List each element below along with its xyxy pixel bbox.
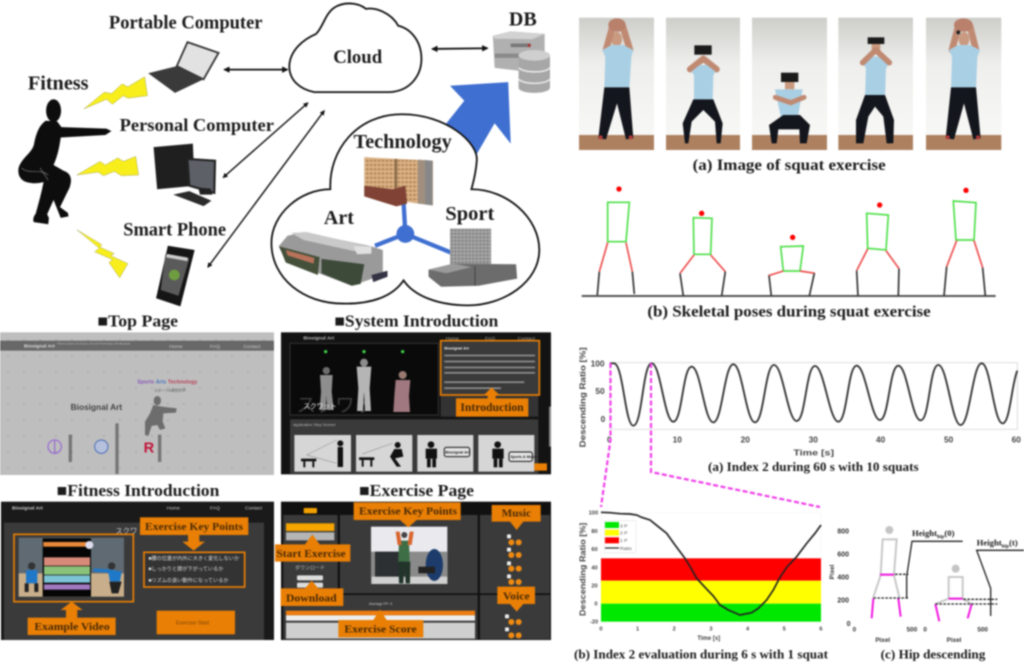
legend: 3 P bbox=[620, 523, 628, 529]
fitness introduction heading: ■Fitness Introduction bbox=[57, 481, 220, 500]
y axis labels: 100 bbox=[589, 511, 598, 517]
exercise start button: Exercise Start bbox=[176, 621, 210, 627]
x axis labels: 500 bbox=[907, 626, 918, 633]
x axis labels: 6 bbox=[819, 626, 822, 632]
x axis labels bbox=[599, 626, 822, 632]
height t label: hip bbox=[1002, 543, 1009, 549]
system introduction heading: ■System Introduction bbox=[334, 312, 499, 331]
x axis labels: 1 bbox=[636, 626, 639, 632]
page background: Biosignal Art bbox=[303, 336, 335, 342]
chart: hip descending bbox=[829, 526, 1024, 662]
x axis labels: 5 bbox=[783, 626, 786, 632]
download label: Download bbox=[286, 593, 337, 605]
video preview with three avatars: スクワット bbox=[303, 402, 337, 410]
start exercise label: Start Exercise bbox=[276, 548, 346, 560]
exercise score label bbox=[338, 609, 423, 637]
panel: top page screenshot bbox=[0, 312, 274, 475]
arrow: cloud to DB bbox=[432, 46, 487, 51]
legend: Ratio bbox=[620, 546, 632, 552]
grey squat figure bbox=[145, 396, 177, 436]
sport label: Sport bbox=[445, 203, 495, 225]
y axis labels: 60 bbox=[591, 547, 598, 553]
caption: skeletal poses: (b) Skeletal poses during squat exercise bbox=[647, 304, 931, 321]
music label bbox=[492, 505, 541, 530]
art building bbox=[279, 232, 387, 286]
height 0 annotation bbox=[873, 541, 963, 598]
start exercise label bbox=[275, 534, 350, 562]
y axis labels bbox=[591, 359, 606, 424]
pose 5 bbox=[944, 188, 985, 296]
download label bbox=[281, 581, 343, 606]
magenta zoom guide lines bbox=[601, 363, 820, 507]
standing skeleton bbox=[872, 526, 901, 618]
introduction text box bbox=[441, 341, 539, 395]
nav bar: FAQ bbox=[210, 344, 220, 350]
key points list: ■しっかりと膝が下がっているか bbox=[148, 565, 223, 573]
x axis labels: 50 bbox=[944, 435, 954, 445]
y axis labels: 40 bbox=[591, 565, 598, 571]
height 0 label: Height bbox=[912, 528, 937, 538]
y axis title: Descending Ratio [%] bbox=[577, 523, 587, 616]
partner logos: R bbox=[144, 441, 155, 457]
squat skeleton bbox=[935, 565, 972, 621]
x axis labels: 60 bbox=[1012, 435, 1021, 445]
application step cards bbox=[294, 435, 537, 472]
cloud shape bbox=[289, 3, 421, 92]
arrow: cloud to PC bbox=[223, 103, 308, 177]
portable computer label: Portable Computer bbox=[109, 13, 262, 34]
x axis labels: 4 bbox=[746, 626, 750, 632]
key points list: ■リズムの良い動作になっているか bbox=[148, 576, 229, 584]
y axis labels: 0 bbox=[594, 602, 597, 608]
y axis labels bbox=[589, 511, 598, 626]
smart phone label: Smart Phone bbox=[123, 220, 226, 241]
y axis labels: -20 bbox=[590, 620, 598, 626]
pose 3 bbox=[768, 235, 815, 296]
height 0 label: hip bbox=[937, 534, 944, 540]
x axis labels bbox=[607, 435, 1021, 445]
voice label bbox=[497, 587, 535, 612]
nav bar: Home bbox=[169, 344, 183, 350]
y axis labels: 200 bbox=[837, 598, 849, 605]
tagline: Sports Arts Technology bbox=[137, 379, 197, 385]
key points label: Exercise Key Points bbox=[145, 521, 243, 533]
page background: Home bbox=[446, 336, 459, 342]
y axis labels: 50 bbox=[595, 386, 605, 396]
caption: index 2 during 60 s: (a) Index 2 during 60 s with 10 squats bbox=[708, 460, 919, 474]
y axis labels: 80 bbox=[591, 529, 598, 535]
x axis labels: 0 bbox=[853, 626, 857, 633]
three-lobed domain cloud bbox=[271, 114, 539, 305]
nav bar: Biosignal Art bbox=[24, 344, 55, 350]
key points list: ■腰の位置が内外に大きく変化しないか bbox=[148, 554, 239, 562]
legend bbox=[604, 521, 636, 553]
height t label: (t) bbox=[1009, 537, 1018, 547]
descending ratio curve bbox=[610, 363, 1017, 426]
ratio curve bbox=[601, 512, 821, 615]
y axis title: Descending Ratio [%] bbox=[577, 347, 587, 447]
page background: Contact bbox=[518, 336, 535, 342]
introduction label: Introduction bbox=[460, 402, 524, 414]
exercise score label: Exercise Score bbox=[344, 624, 417, 636]
video preview with three avatars bbox=[290, 343, 438, 417]
laptop icon bbox=[148, 42, 219, 93]
arrow: cloud to phone bbox=[208, 111, 324, 267]
photo 2: descending bbox=[666, 18, 740, 150]
arrow up to video bbox=[61, 602, 83, 618]
score table: Average FP: 0 bbox=[369, 602, 392, 606]
x axis title: Time [s] bbox=[697, 636, 720, 642]
DB label: DB bbox=[509, 9, 537, 31]
hub connecting domains bbox=[375, 202, 452, 253]
arrow up to introduction bbox=[484, 387, 499, 399]
exercise page heading: ■Exercise Page bbox=[359, 481, 474, 500]
desktop PC icon bbox=[154, 144, 215, 206]
page background: スクワ bbox=[115, 526, 137, 535]
x axis labels bbox=[853, 626, 988, 644]
introduction text box: Biosignal Art bbox=[444, 345, 470, 350]
squat silhouette bbox=[18, 99, 111, 224]
nav bar bbox=[0, 341, 274, 351]
x axis labels: 10 bbox=[673, 435, 682, 445]
y axis labels: 400 bbox=[837, 574, 849, 581]
page background bbox=[281, 332, 551, 474]
y axis labels: 20 bbox=[591, 583, 598, 589]
panel: system overview diagram bbox=[18, 3, 550, 306]
music and voice option buttons bbox=[505, 534, 522, 638]
cloud label: Cloud bbox=[333, 47, 383, 68]
voice label: Voice bbox=[503, 590, 530, 602]
application step cards: Biosignal Art bbox=[445, 450, 471, 455]
photo 1: standing bbox=[579, 18, 654, 150]
y axis labels: 0 bbox=[601, 414, 606, 424]
x axis labels: 30 bbox=[809, 435, 818, 445]
nav bar: Contact bbox=[243, 344, 261, 350]
music label: Music bbox=[502, 508, 531, 520]
page-top button bbox=[534, 463, 547, 471]
page background: Biosignal Art bbox=[12, 505, 43, 511]
tagline bbox=[137, 379, 197, 392]
pose 4 bbox=[857, 202, 899, 296]
panel: squat images and skeleton poses bbox=[579, 18, 1001, 321]
top page heading: ■Top Page bbox=[97, 312, 178, 331]
key points label bbox=[140, 517, 248, 535]
caption: hip descending: (c) Hip descending bbox=[881, 648, 986, 662]
y axis labels: 100 bbox=[591, 359, 605, 369]
video preview with three avatars: スクワッ bbox=[297, 395, 374, 417]
chart: index 2 evaluation during 6 s bbox=[574, 511, 829, 662]
exercise key points label: Exercise Key Points bbox=[359, 506, 457, 518]
arrow down to key points bbox=[182, 534, 205, 551]
y axis labels: 800 bbox=[837, 528, 849, 535]
x axis labels: Pixel bbox=[947, 637, 962, 644]
photo 5: standing bbox=[926, 18, 1001, 150]
page background bbox=[0, 332, 274, 475]
page background: FAQ bbox=[485, 336, 495, 342]
height t label: Height bbox=[977, 537, 1002, 547]
technology building bbox=[364, 157, 433, 206]
score table bbox=[286, 602, 475, 639]
score bands bbox=[601, 513, 821, 622]
x axis labels: 500 bbox=[977, 626, 988, 633]
chart: index 2 during 60 s bbox=[577, 347, 1021, 474]
panel: system introduction screenshot bbox=[281, 312, 551, 474]
fitness label: Fitness bbox=[28, 72, 89, 94]
page background: Application Step Screen bbox=[293, 422, 336, 427]
example video label: Example Video bbox=[34, 621, 110, 633]
application step cards: Sports & Music bbox=[510, 455, 537, 459]
panel: exercise page screenshot bbox=[275, 481, 551, 640]
technology label: Technology bbox=[354, 131, 452, 153]
x axis labels: 3 bbox=[709, 626, 712, 632]
biosignal art title: Biosignal Art bbox=[71, 402, 122, 412]
y axis title: Pixel bbox=[829, 564, 836, 579]
photo 4: ascending bbox=[838, 18, 913, 150]
x axis labels: 40 bbox=[876, 435, 886, 445]
page background bbox=[281, 502, 551, 640]
height 0 label: (0) bbox=[944, 528, 955, 538]
caption: index 2 evaluation: (b) Index 2 evaluation during 6 s with 1 squat bbox=[574, 648, 829, 662]
legend: 2 P bbox=[620, 531, 628, 537]
nav bar: Fitness System for Sports, Arts and Technology with Biosignal bbox=[57, 342, 130, 346]
x axis labels: 0 bbox=[923, 626, 927, 633]
pose 2 bbox=[680, 211, 725, 296]
x axis labels: Pixel bbox=[875, 637, 890, 644]
start and stop buttons: ダウンロード bbox=[295, 564, 325, 571]
database icon bbox=[493, 31, 550, 93]
tagline: スポーツ&感性科学 bbox=[154, 387, 186, 392]
height t annotation bbox=[935, 550, 1024, 616]
page background: FAQ bbox=[210, 505, 220, 511]
exercise key points label bbox=[354, 502, 461, 527]
x axis labels: 0 bbox=[607, 435, 612, 445]
ground line bbox=[582, 293, 996, 299]
panel: fitness introduction screenshot bbox=[1, 481, 274, 640]
introduction label bbox=[456, 398, 528, 417]
personal computer label: Personal Computer bbox=[120, 115, 274, 135]
x axis title: Time [s] bbox=[793, 448, 834, 458]
blue arrow to DB bbox=[446, 82, 511, 157]
x axis labels: 20 bbox=[741, 435, 750, 445]
page background: Contact bbox=[245, 505, 263, 511]
skeleton poses bbox=[582, 186, 996, 296]
pose 1 bbox=[597, 186, 634, 295]
smart phone icon bbox=[156, 246, 195, 306]
art label: Art bbox=[324, 207, 354, 229]
y axis labels: 600 bbox=[837, 551, 849, 558]
partner logos bbox=[48, 440, 155, 457]
photo 3: bottom of squat bbox=[752, 18, 827, 150]
y axis labels bbox=[837, 528, 851, 628]
example video label bbox=[28, 618, 116, 635]
vertical partner names bbox=[69, 423, 161, 474]
y axis labels: 0 bbox=[847, 621, 851, 628]
plot frame bbox=[610, 363, 1017, 429]
example video frame bbox=[14, 534, 133, 602]
exercise camera view bbox=[371, 527, 447, 584]
caption: image of squat exercise: (a) Image of squat exercise bbox=[693, 157, 886, 174]
x axis labels: 2 bbox=[673, 626, 676, 632]
exercise start button bbox=[157, 611, 235, 634]
page background: Home bbox=[167, 505, 180, 511]
arrow: laptop to cloud bbox=[224, 67, 287, 72]
x axis labels: 0 bbox=[599, 626, 602, 632]
page background bbox=[1, 502, 274, 640]
sport building bbox=[429, 229, 517, 287]
lightning bolts bbox=[77, 77, 147, 278]
key points list bbox=[144, 552, 245, 587]
legend: 1 P bbox=[620, 538, 628, 544]
start and stop buttons bbox=[286, 523, 334, 588]
